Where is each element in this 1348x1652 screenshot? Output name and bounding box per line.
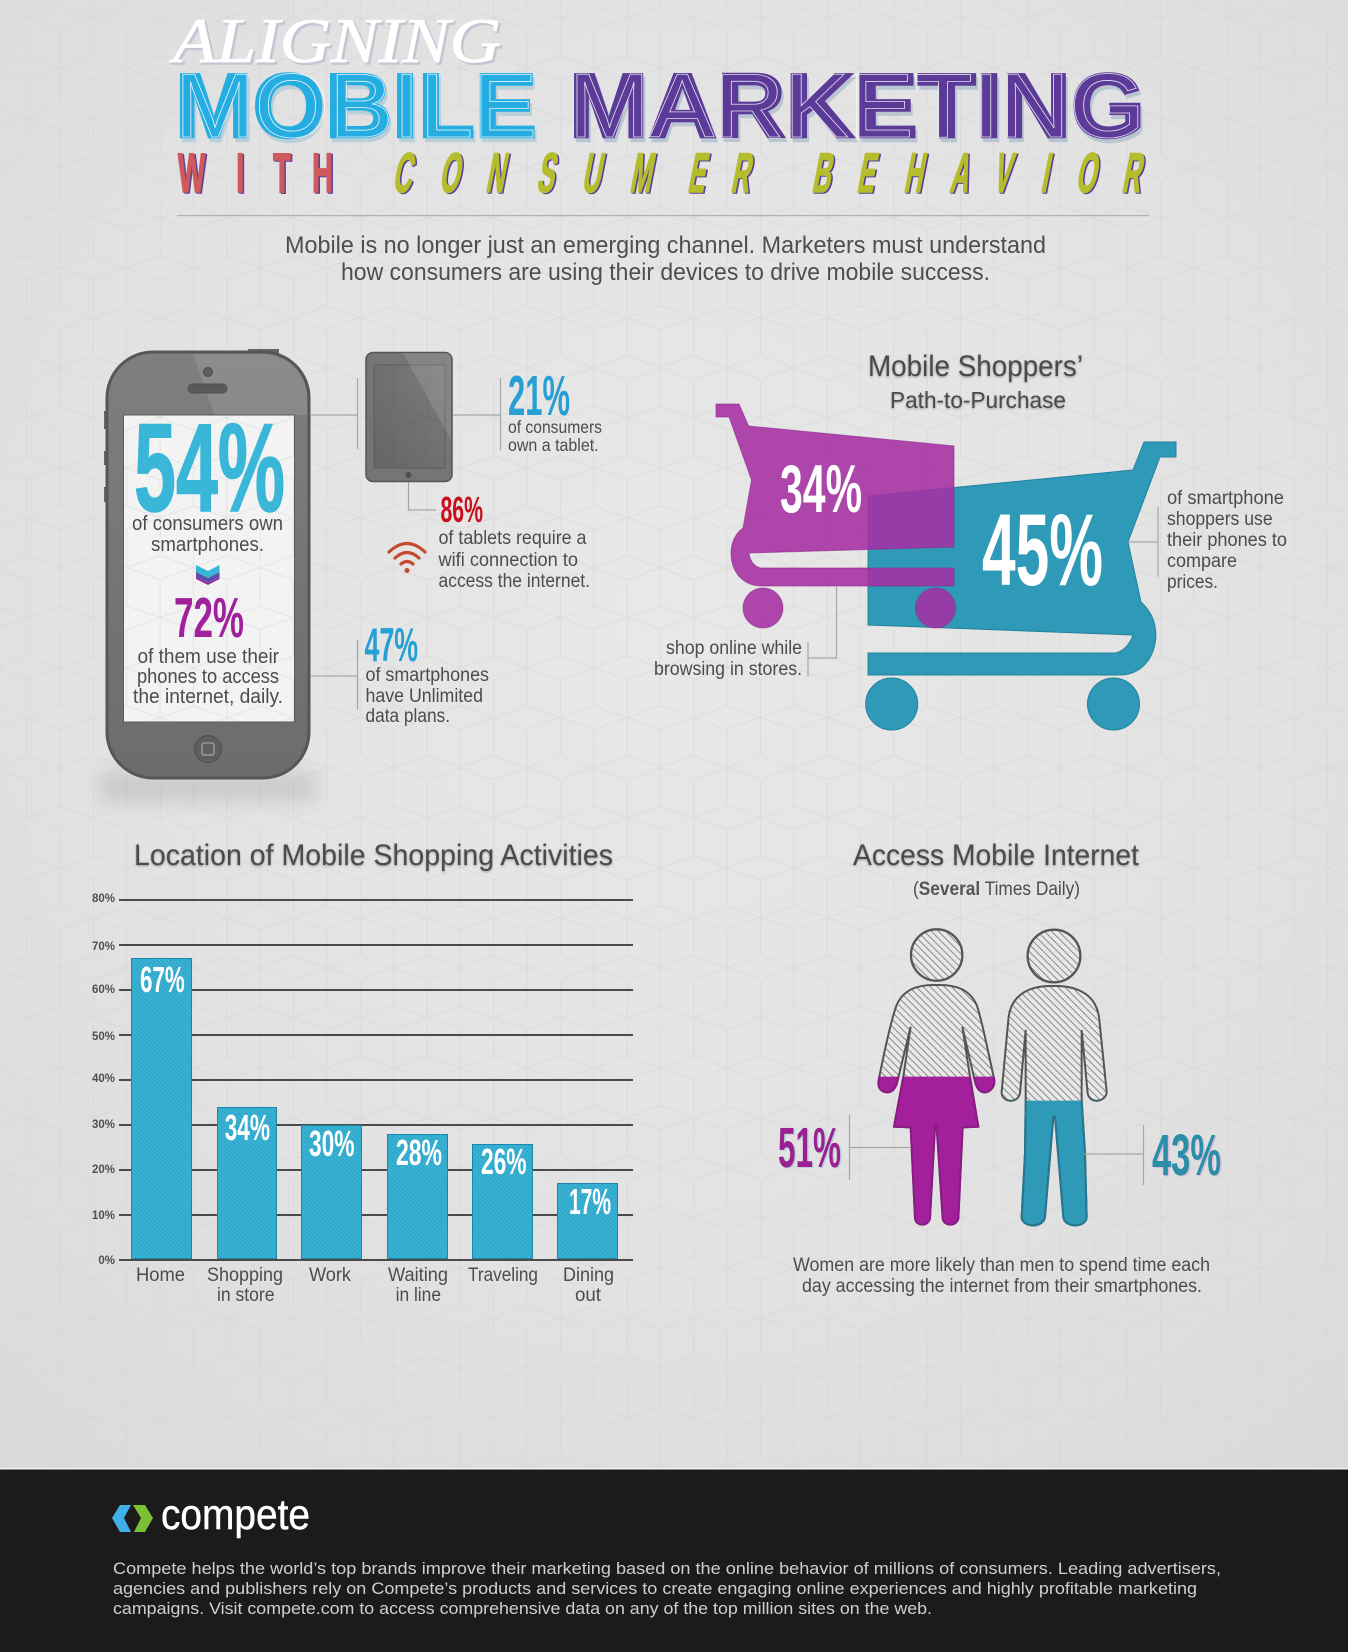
y axis labels: 70% [92,941,115,953]
heading: access mobile internet [853,839,1140,900]
bars [132,958,618,1258]
stat: 43% men: 43% [1154,1124,1222,1189]
y axis labels [92,893,115,1267]
stat: 86% of tablets require wifi [438,489,590,592]
footer [0,1468,1348,1652]
callout: smartphone shoppers compare prices: of smartphone [1167,488,1284,509]
caption: Women are more likely than men to spend time each [793,1255,1210,1276]
caption [793,1255,1210,1297]
title line: marketing: MARKETING [571,60,1147,161]
title line: with: WITH [178,143,333,205]
bar values [140,959,611,1222]
title line: mobile: MOBILE [175,56,537,157]
category labels: Shopping [207,1265,283,1286]
title line: mobile: MOBILE [175,56,537,157]
phone shadow [100,772,316,802]
stat: 43% men [1084,1123,1222,1189]
stat: 47% unlimited data plans [364,618,489,727]
footer text: Compete helps the world’s top brands improve their marketing based on the online behavior of millions of consumers. Leading advertisers, [113,1560,1221,1578]
category labels: in store [217,1285,274,1306]
heading: mobile shoppers: Mobile Shoppers’ [868,350,1083,383]
logo: compete [112,1491,310,1539]
category labels: Traveling [468,1265,538,1286]
y axis labels: 10% [92,1210,115,1222]
icon: man figure [1002,930,1107,1225]
stat: 45%: 45% [982,493,1103,607]
stat: 72% use phones daily [133,586,283,708]
stat: 86% of tablets require wifi: wifi connection to [438,550,578,571]
stat: 47% unlimited data plans: have Unlimited [366,686,483,707]
title line: with: WITH [179,144,335,206]
icon: chevron [196,565,220,585]
stat: 72% use phones daily: the internet, daily. [133,686,283,708]
y axis labels: 80% [92,893,115,905]
stat: 21% own a tablet: own a tablet. [508,435,599,455]
category labels: Dining [563,1265,614,1286]
bar values: 28% [396,1132,442,1173]
callout: smartphone shoppers compare prices: compare [1167,551,1237,572]
y axis labels: 50% [92,1031,115,1043]
stat: 47% unlimited data plans: of smartphones [366,665,489,686]
stat: 54% of consumers own smartphones [132,399,285,556]
bar values: 26% [481,1141,526,1182]
stat: 86% of tablets require wifi: of tablets require a [438,528,587,549]
stat: 54% of consumers own smartphones: smartphones. [151,534,264,556]
stat: 21% own a tablet: of consumers [508,417,602,437]
category labels: Work [309,1265,351,1286]
heading: mobile shoppers: Path-to-Purchase [890,387,1066,413]
callout: smartphone shoppers compare prices: their phones to [1167,530,1287,551]
y axis labels: 60% [92,984,115,996]
panel: location of mobile shopping activities [92,839,633,1306]
stat: 54% of consumers own smartphones: of consumers own [132,513,283,535]
stat: 47% unlimited data plans: data plans. [366,706,450,727]
stat: 21% own a tablet [508,364,602,455]
heading: access mobile internet: Access Mobile Internet [853,839,1140,872]
panel: mobile shoppers path to purchase [654,350,1287,730]
title line: consumer behavior: BEHAVIOR [810,144,1151,206]
footer text [113,1560,1221,1618]
footer text: campaigns. Visit compete.com to access comprehensive data on any of the top million sites on the web. [113,1600,932,1618]
callout: shop online while browsing: browsing in stores. [654,659,802,680]
y axis labels: 20% [92,1164,115,1176]
category labels: out [575,1285,602,1306]
stat: 86% of tablets require wifi: 86% [440,489,483,530]
title line: consumer behavior: CONSUMER [391,144,760,206]
heading: location: Location of Mobile Shopping Activities [134,839,613,872]
callout: smartphone shoppers compare prices: shoppers use [1167,509,1273,530]
callout: shop online while browsing: shop online while [666,638,802,659]
y axis labels: 40% [92,1073,115,1085]
callout: shop online while browsing [654,587,836,680]
stat: 72% use phones daily: 72% [174,586,244,650]
stat: 72% use phones daily: phones to access [137,666,279,688]
title line: aligning: ALIGNING [169,5,501,76]
panel: access mobile internet [778,839,1222,1297]
stat: 21% own a tablet: 21% [508,364,570,428]
stat: 51% women: 51% [778,1116,841,1180]
title line: consumer behavior: BEHAVIOR [809,143,1149,205]
phone body [104,349,309,778]
category labels: Home [136,1265,185,1286]
stat: 51% women: 51% [780,1117,842,1181]
stat: 54% of consumers own smartphones: 54% [134,399,285,538]
category labels: Waiting [388,1265,448,1286]
bar values: 67% [140,959,185,1000]
logo: compete: compete [161,1491,310,1539]
title line: marketing: MARKETING [569,56,1145,157]
title line: consumer behavior: CONSUMER [389,143,758,205]
category labels: in line [396,1285,441,1306]
category labels [136,1265,614,1306]
title line: aligning: ALIGNING [171,7,503,78]
panel: smartphone [100,349,316,802]
icon: wifi [389,544,425,573]
stat: 47% unlimited data plans: 47% [364,618,418,671]
title [169,5,1151,206]
y axis labels: 0% [98,1255,115,1267]
subtitle [285,232,1046,286]
subtitle: how consumers are using their devices to drive mobile success. [341,259,990,286]
heading: access mobile internet: (Several Times Daily) [913,879,1080,900]
caption: day accessing the internet from their smartphones. [802,1276,1202,1297]
icon: teal cart [866,442,1176,730]
bar values: 30% [309,1123,354,1164]
stat: 43% men: 43% [1152,1123,1221,1188]
phone screen [124,415,294,722]
stat: 72% use phones daily: of them use their [138,646,279,668]
heading: mobile shoppers [868,350,1083,413]
bar chart [92,893,633,1306]
title line: consumer behavior [389,143,1151,206]
tablet body [366,352,452,482]
stat: 86% of tablets require wifi: access the internet. [438,571,590,592]
title line: marketing: MARKETING [569,56,1145,157]
y axis labels: 30% [92,1119,115,1131]
icon: woman figure [878,929,994,1225]
connector: phone to tablet [310,378,500,710]
stat: 34%: 34% [780,451,862,527]
callout: smartphone shoppers compare prices [1128,488,1287,593]
footer text: agencies and publishers rely on Compete’s products and services to create engaging online experiences and highly profitable marketing [113,1580,1197,1598]
panel: tablet [366,352,452,482]
subtitle: Mobile is no longer just an emerging channel. Marketers must understand [285,232,1046,259]
tablet screen [374,365,445,468]
bar values: 34% [225,1107,270,1148]
bar values: 17% [569,1181,611,1222]
callout: smartphone shoppers compare prices: prices. [1167,572,1218,593]
icon: purple cart [716,404,956,628]
title line: mobile: MOBILE [177,60,539,161]
